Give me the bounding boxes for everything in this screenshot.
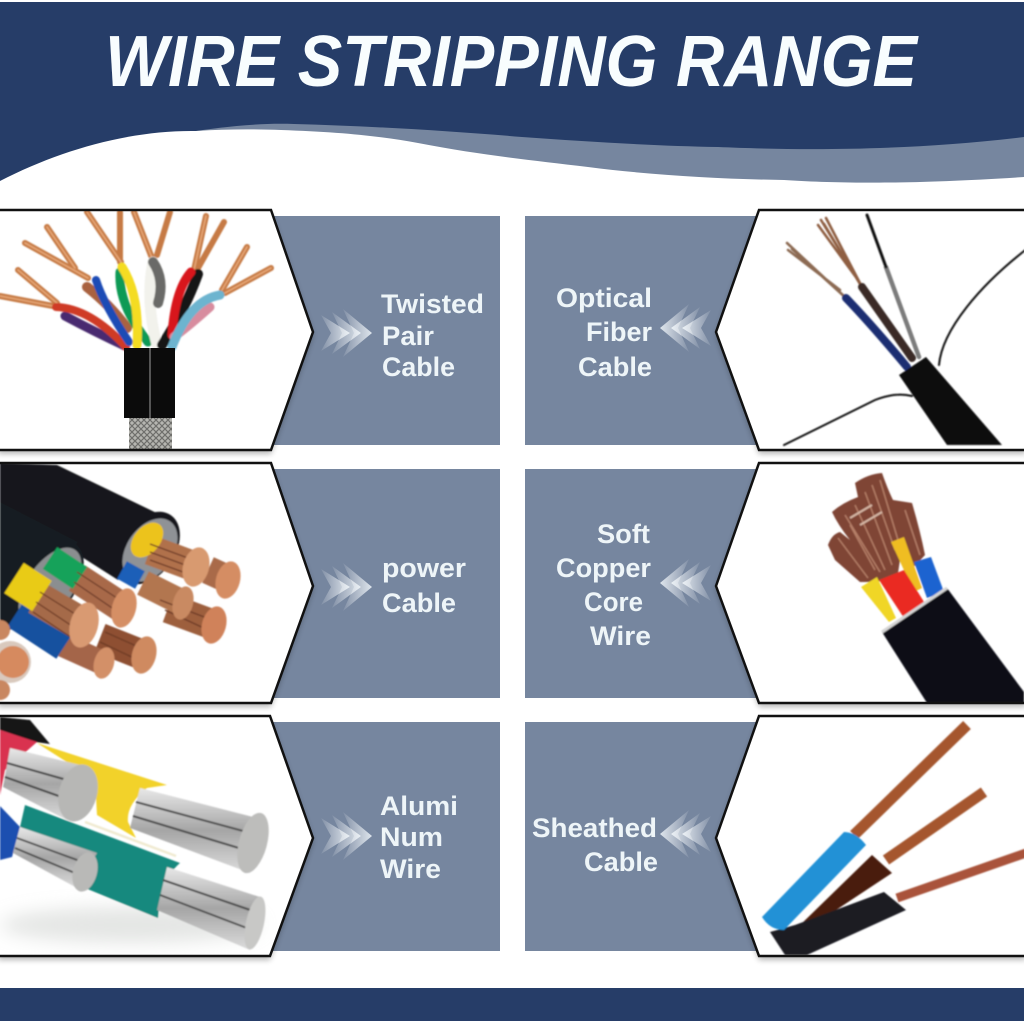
label: power cable: Cable: [382, 588, 456, 618]
label: twisted pair cable: Pair: [382, 321, 434, 351]
arrow: chevrons right: [321, 812, 372, 860]
label: soft copper core wire: Soft: [597, 519, 650, 549]
label: soft copper core wire: Wire: [590, 621, 651, 651]
label: aluminum wire: Num: [380, 822, 443, 852]
panel: aluminum wire: [0, 716, 500, 960]
arrow: chevrons left: [660, 810, 711, 858]
label: aluminum wire: Wire: [380, 854, 441, 884]
footer band: [0, 988, 1024, 1021]
label: optical fiber cable: Fiber: [586, 317, 652, 347]
label: sheathed cable: [532, 813, 658, 877]
panel: sheathed cable: [525, 716, 1024, 960]
image: optical fiber cable: [784, 215, 1024, 445]
panel: optical fiber cable: [525, 210, 1024, 454]
image: sheathed cable: [762, 725, 1024, 955]
label: sheathed cable: Cable: [584, 847, 658, 877]
arrow: chevrons right: [321, 309, 372, 357]
label: sheathed cable: Sheathed: [532, 813, 657, 843]
label: aluminum wire: Alumi: [380, 791, 458, 821]
label: optical fiber cable: Optical: [556, 283, 652, 313]
label: aluminum wire: [380, 791, 458, 884]
label: soft copper core wire: Core: [584, 587, 643, 617]
label: twisted pair cable: Twisted: [381, 289, 484, 319]
image: aluminum wire: [0, 717, 275, 951]
panel: soft copper core wire: [525, 463, 1024, 707]
label: power cable: power: [382, 553, 467, 583]
label: optical fiber cable: Cable: [578, 352, 652, 382]
label: optical fiber cable: [556, 283, 652, 382]
label: power cable: [382, 553, 467, 618]
label: soft copper core wire: Copper: [556, 553, 651, 583]
arrow: chevrons left: [660, 559, 711, 607]
label: twisted pair cable: [381, 289, 484, 382]
title: WIRE STRIPPING RANGE: [105, 22, 919, 102]
arrow: chevrons left: [660, 304, 711, 352]
image: soft copper core wire: [828, 473, 1024, 703]
panel: power cable: [0, 463, 500, 707]
label: twisted pair cable: Cable: [382, 352, 455, 382]
panel: twisted pair cable: [0, 210, 500, 454]
image: power cable: [0, 463, 245, 700]
label: soft copper core wire: [556, 519, 651, 651]
image: twisted pair cable: [0, 212, 271, 450]
header banner: [0, 2, 1024, 190]
arrow: chevrons right: [321, 563, 372, 611]
